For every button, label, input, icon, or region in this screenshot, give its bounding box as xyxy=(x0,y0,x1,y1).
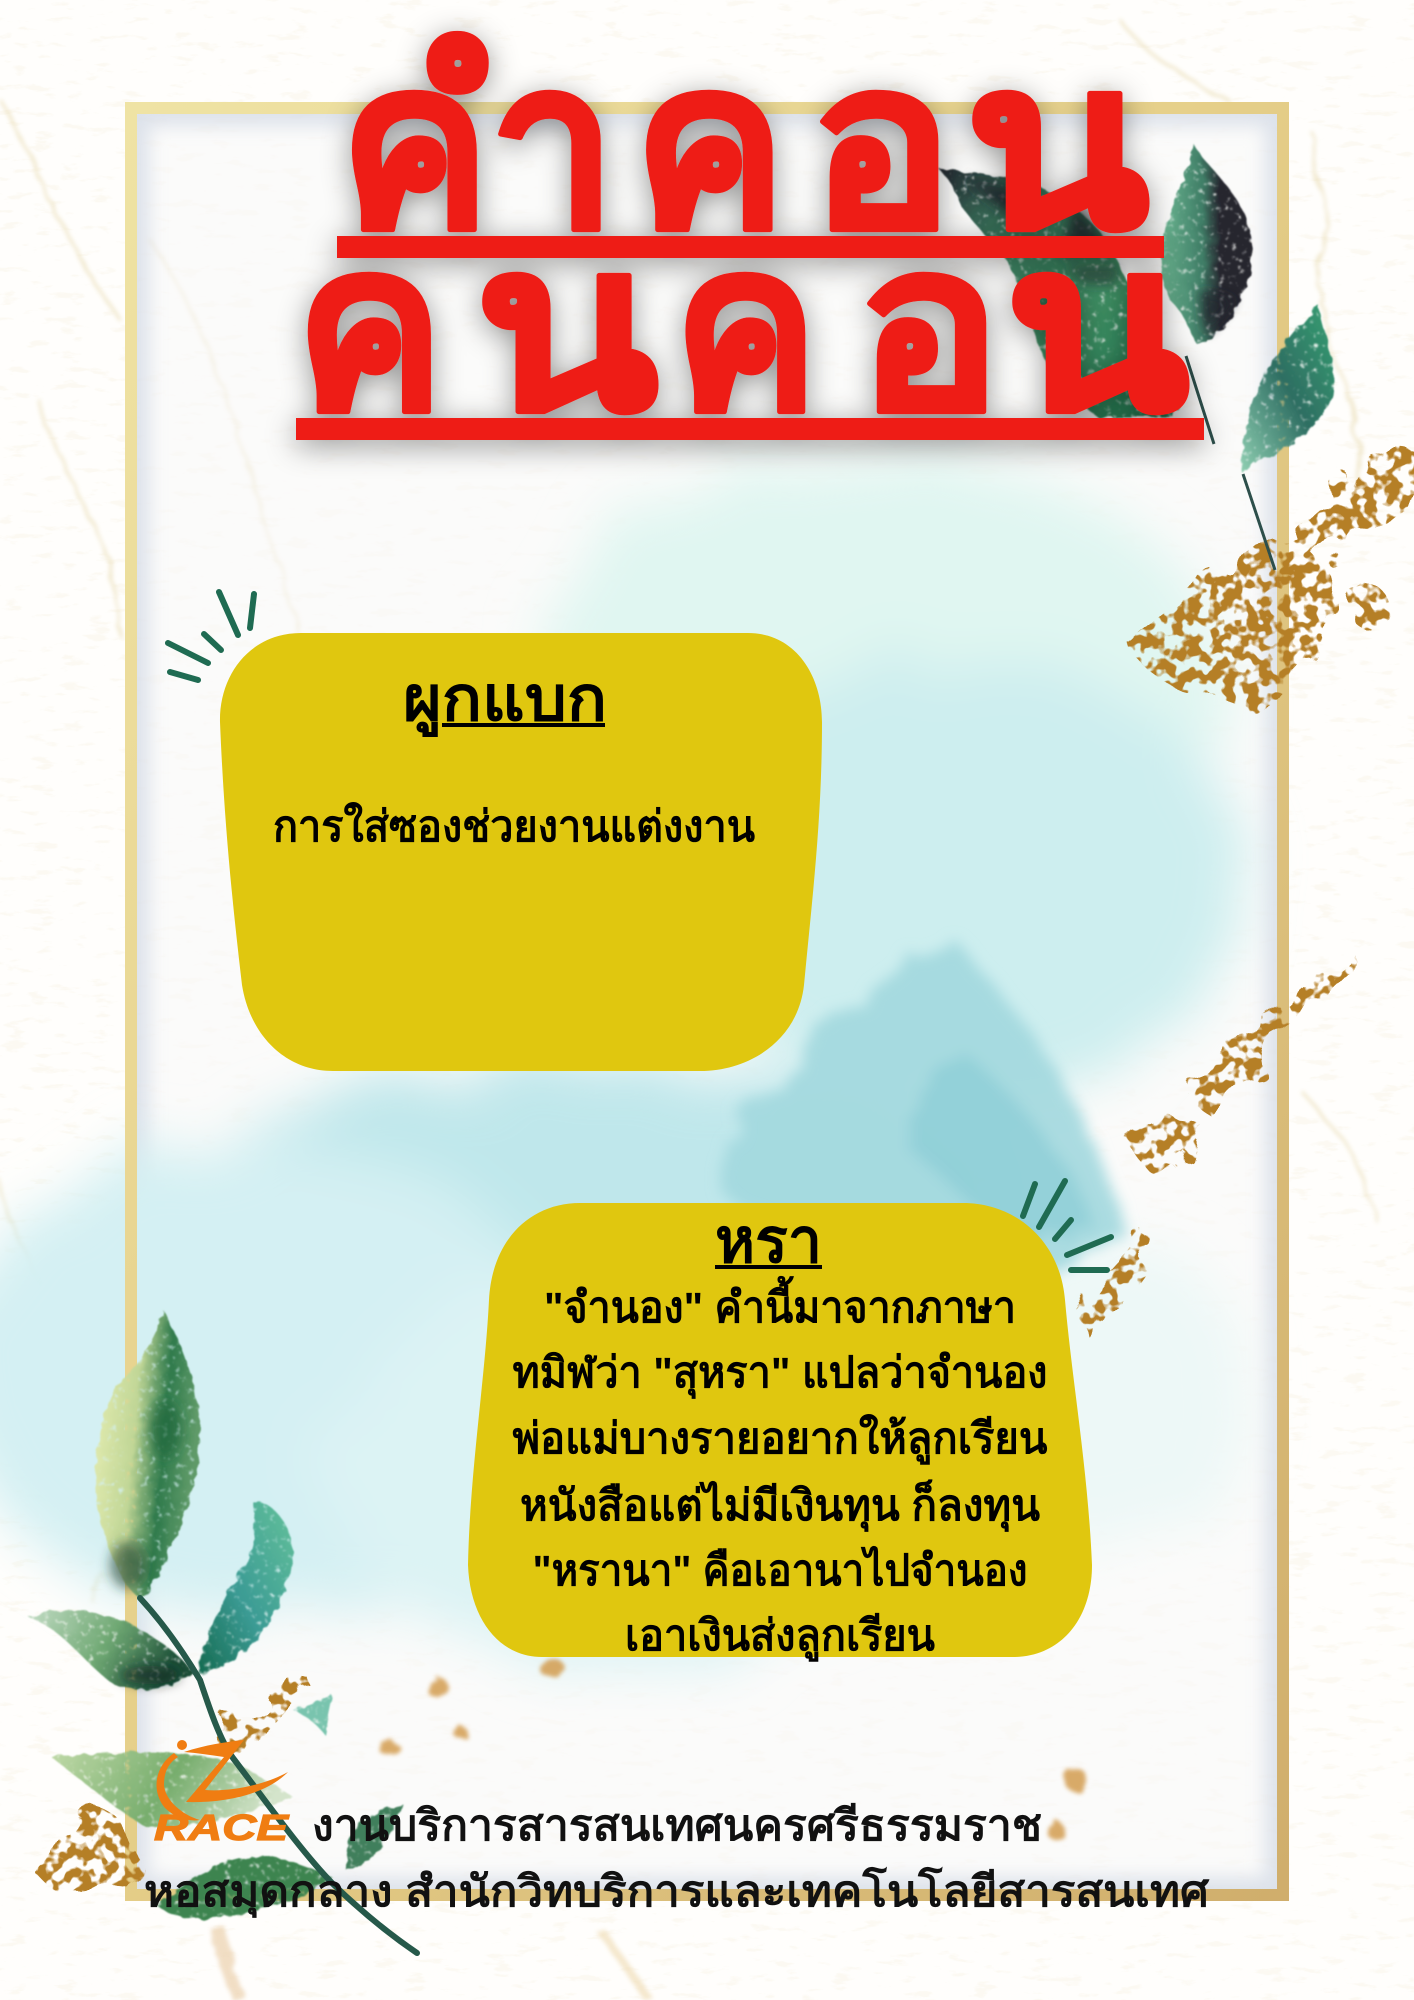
leaf E xyxy=(157,1856,333,1919)
bottom-left plant xyxy=(28,1310,417,1953)
title line 2: ค xyxy=(674,199,818,458)
leaf A xyxy=(95,1310,200,1598)
body text: เอาเงินส่งลูกเรียน xyxy=(625,1612,936,1662)
stems xyxy=(1186,356,1275,570)
gold frame xyxy=(131,108,1283,1895)
leaf B xyxy=(199,1502,292,1676)
title underline 2 xyxy=(296,418,1204,440)
body text: พ่อแม่บางรายอยากให้ลูกเรียน xyxy=(512,1413,1048,1465)
title line 2: น xyxy=(1005,199,1189,458)
logo mark xyxy=(156,1740,288,1820)
panel: ผูกแบก xyxy=(220,633,822,1071)
leaf: green right xyxy=(1242,304,1334,474)
title underline 1 xyxy=(337,236,1164,258)
logo: RACE xyxy=(154,1740,289,1848)
logo wordmark: RACE xyxy=(154,1807,289,1848)
footer line 2: หอสมุดกลาง สำนักวิทบริการและเทคโนโลยีสารสนเทศ xyxy=(144,1865,1210,1919)
leaf: large diagonal xyxy=(938,168,1186,417)
leaf D xyxy=(50,1753,293,1828)
title line 2: ค xyxy=(296,199,444,458)
heading underline xyxy=(442,723,605,727)
box shape xyxy=(468,1203,1092,1657)
title line 2: อ xyxy=(857,199,1001,458)
sparkle marks: box 2 xyxy=(1023,1181,1111,1270)
small teal leaf xyxy=(293,1696,333,1735)
dark leaf blots xyxy=(965,180,1235,335)
panel: หรา xyxy=(468,1203,1092,1662)
heading: ผูกแบก xyxy=(403,665,607,737)
heading: หรา xyxy=(715,1207,822,1276)
title line 2: น xyxy=(475,199,658,458)
title line 1: อ xyxy=(810,17,953,276)
footer text xyxy=(144,1802,1210,1919)
box shape xyxy=(220,633,822,1071)
gold glitter splashes xyxy=(40,445,1414,1890)
heading underline xyxy=(715,1265,822,1269)
footer line 1: งานบริการสารสนเทศนครศรีธรรมราช xyxy=(312,1802,1042,1850)
gold splatter dots xyxy=(377,1658,1084,1838)
leaf F xyxy=(347,1804,403,1871)
body text: การใส่ซองช่วยงานแต่งงาน xyxy=(273,801,756,851)
watercolour: dark teal xyxy=(720,945,1121,1272)
title line 1: น xyxy=(965,17,1149,276)
stem xyxy=(140,1598,417,1953)
body text xyxy=(512,1275,1048,1662)
body text: "หรานา" คือเอานาไปจำนอง xyxy=(532,1545,1028,1595)
sparkle marks: box 1 xyxy=(168,592,254,680)
leaf C xyxy=(28,1610,193,1689)
leaf dark blots xyxy=(110,1402,181,1684)
title: คำคอน คนคอน xyxy=(296,17,1204,458)
body text: "จำนอง" คำนี้มาจากภาษา xyxy=(544,1275,1016,1332)
body text: ทมิฬว่า "สุหรา" แปลว่าจำนอง xyxy=(512,1349,1048,1400)
title line 1: ค xyxy=(634,17,786,276)
top-right leaves xyxy=(938,143,1334,570)
leaf: dark upper xyxy=(1162,143,1251,344)
title line 1: คำ xyxy=(340,17,616,276)
body text: หนังสือแต่ไม่มีเงินทุน ก็ลงทุน xyxy=(520,1479,1041,1533)
